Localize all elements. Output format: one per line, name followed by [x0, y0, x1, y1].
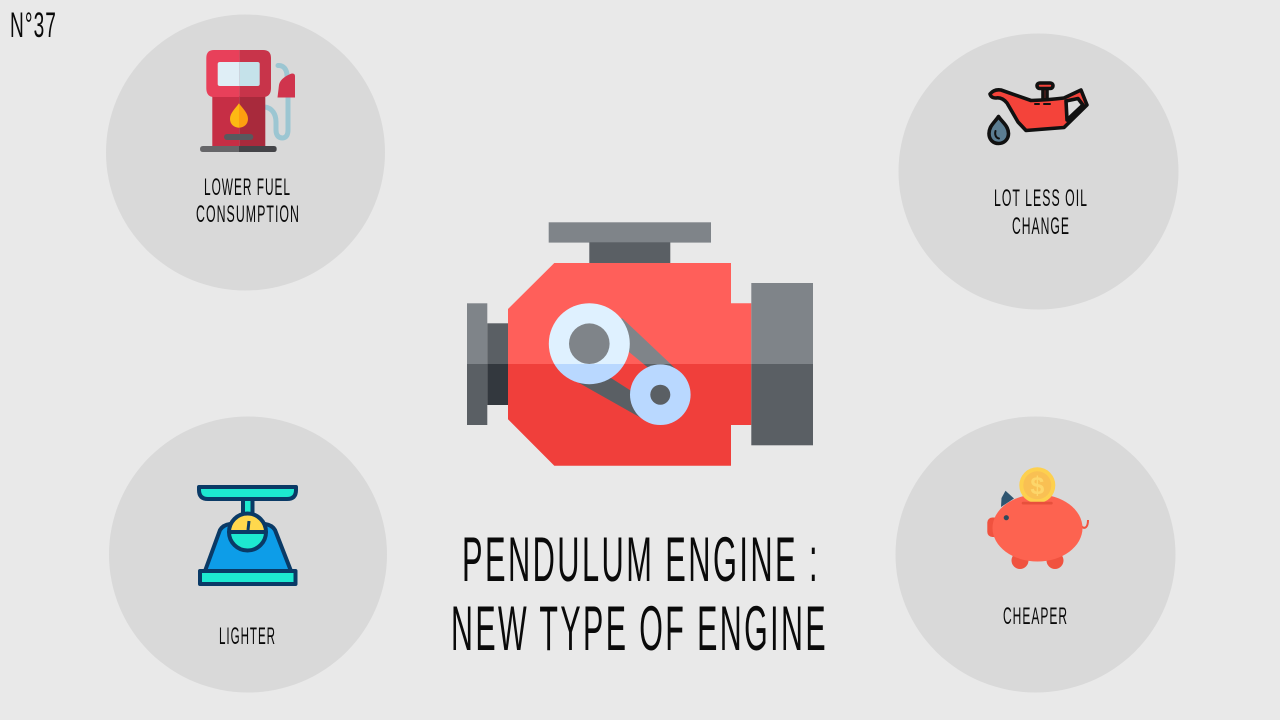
- engine left flange: [467, 303, 508, 425]
- icon: piggy bank: [987, 467, 1088, 569]
- engine block: [508, 263, 751, 466]
- panel: cheaper: CHEAPER: [1003, 603, 1068, 630]
- label: lot less oil change: CHANGE: [1012, 213, 1070, 240]
- icon: oil can: [989, 83, 1087, 144]
- label: lower fuel consumption: CONSUMPTION: [196, 201, 300, 228]
- label: lower fuel consumption: LOWER FUEL: [204, 174, 291, 201]
- panel: lot less oil change: [898, 34, 1178, 310]
- icon: fuel pump: [200, 50, 295, 152]
- title: [451, 525, 828, 664]
- label: lower fuel consumption: [196, 174, 300, 228]
- panel: lower fuel consumption: [106, 14, 385, 290]
- panel: lighter: [109, 416, 387, 692]
- engine right block: [751, 283, 813, 445]
- icon: weighing scale: [199, 487, 296, 584]
- large pulley: [549, 303, 630, 384]
- small pulley: [630, 364, 691, 425]
- label: lot less oil change: LOT LESS OIL: [994, 185, 1088, 212]
- panel: lighter: LIGHTER: [219, 623, 276, 650]
- label: lot less oil change: [994, 185, 1088, 240]
- panel: cheaper: [896, 416, 1176, 692]
- icon: piggy bank: $: [1030, 472, 1044, 500]
- infographic canvas: NEW TYPE OF ENGINE: [451, 594, 828, 664]
- infographic canvas: PENDULUM ENGINE :: [462, 525, 820, 595]
- icon: engine: [467, 222, 813, 466]
- pulley belt: [572, 318, 678, 418]
- slide number: N°37: [10, 6, 57, 45]
- engine top plate: [549, 222, 711, 263]
